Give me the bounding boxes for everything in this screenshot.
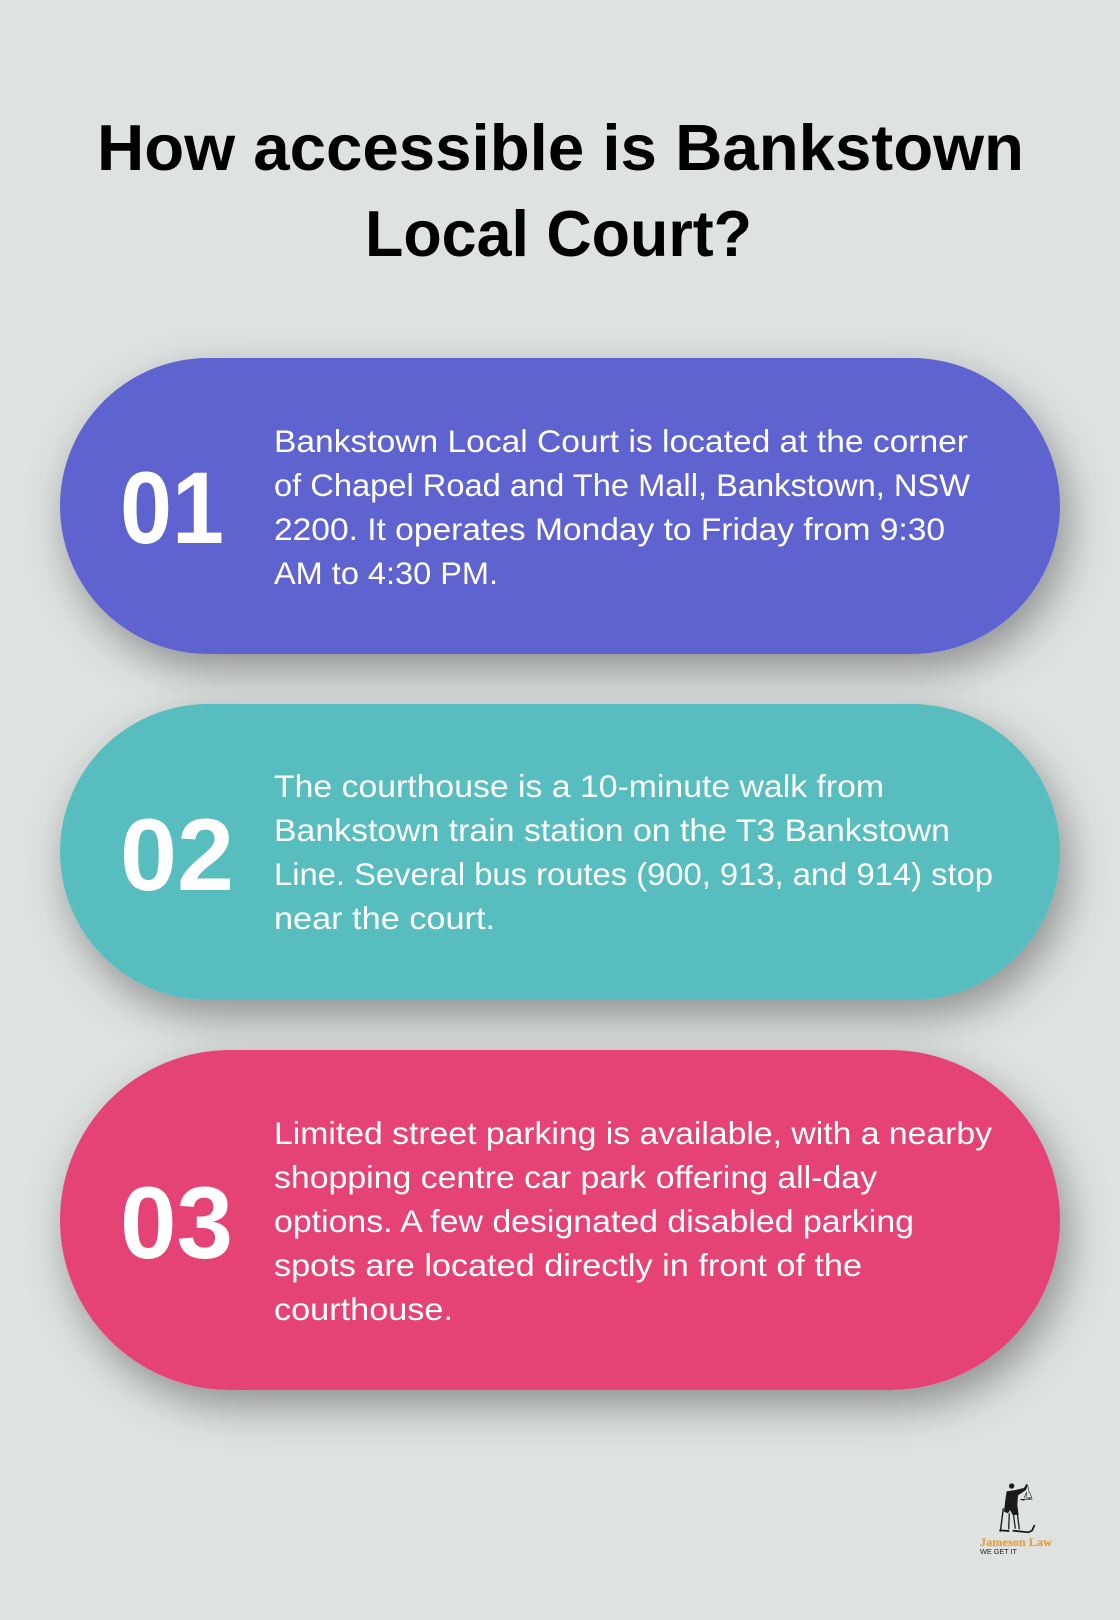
logo tagline: WE GET IT xyxy=(980,1547,1017,1556)
title xyxy=(97,111,1024,270)
title: Local Court? xyxy=(365,197,752,270)
text block 01: 2200. It operates Monday to Friday from 9:30 xyxy=(274,511,945,547)
title: How accessible is Bankstown xyxy=(97,111,1024,184)
text block 03 xyxy=(274,1115,992,1327)
panel: step 02 public transport xyxy=(60,704,1060,1000)
text block 02 xyxy=(274,768,993,936)
text block 03: shopping centre car park offering all-day xyxy=(274,1159,877,1195)
text block 02: near the court. xyxy=(274,900,495,936)
number 01: 01 xyxy=(120,451,224,565)
text block 03: courthouse. xyxy=(274,1291,453,1327)
text block 03: Limited street parking is available, with a nearby xyxy=(274,1115,992,1151)
pill background 01 xyxy=(60,358,1060,654)
number 03: 03 xyxy=(120,1166,233,1280)
text block 02: Line. Several bus routes (900, 913, and 914) stop xyxy=(274,856,993,892)
pill background 03 xyxy=(60,1050,1060,1390)
text block 01: AM to 4:30 PM. xyxy=(274,555,498,591)
logo name: Jameson Law xyxy=(980,1535,1052,1549)
text block 02: Bankstown train station on the T3 Bankstown xyxy=(274,812,950,848)
text block 01: of Chapel Road and The Mall, Bankstown, NSW xyxy=(274,467,970,503)
panel: step 01 location and hours xyxy=(60,358,1060,654)
text block 01: Bankstown Local Court is located at the corner xyxy=(274,423,968,459)
text block 01 xyxy=(274,423,970,591)
text block 03: spots are located directly in front of the xyxy=(274,1247,862,1283)
pill background 02 xyxy=(60,704,1060,1000)
text block 03: options. A few designated disabled parking xyxy=(274,1203,914,1239)
logo: Jameson Law xyxy=(980,1483,1052,1556)
text block 02: The courthouse is a 10-minute walk from xyxy=(274,768,884,804)
panel: step 03 parking xyxy=(60,1050,1060,1390)
number 02: 02 xyxy=(120,798,234,912)
icon: lady justice figure xyxy=(999,1483,1035,1532)
